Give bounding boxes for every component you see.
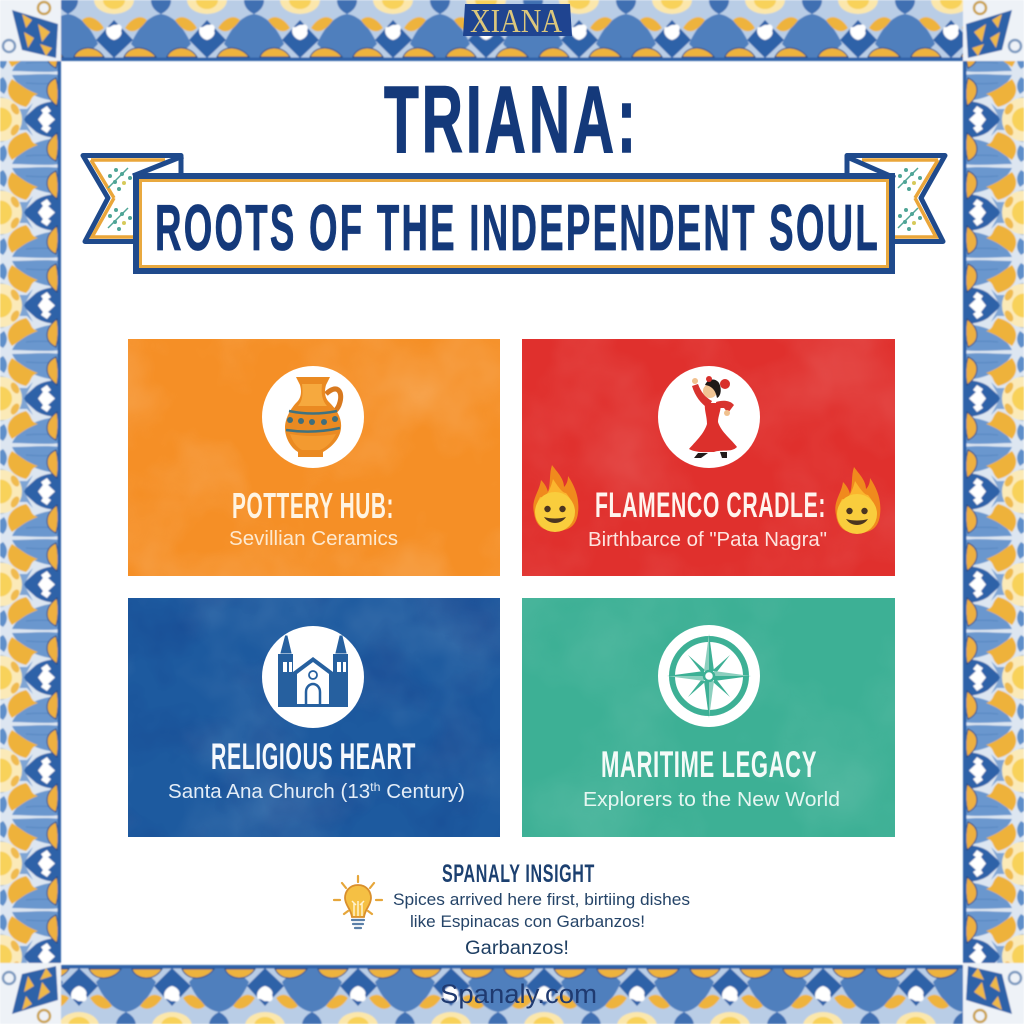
insight block xyxy=(334,860,690,959)
subheading: Century) xyxy=(380,781,465,803)
footer url: Spanaly.com xyxy=(440,979,597,1009)
insight text line 3: Garbanzos! xyxy=(465,938,569,959)
icon: compass rose xyxy=(658,625,760,727)
icon: church xyxy=(262,626,364,728)
icon: flamenco dancer xyxy=(658,366,760,468)
title: TRIANA: xyxy=(384,67,639,173)
panel: flamenco cradle xyxy=(522,339,895,576)
heading: RELIGIOUS HEART xyxy=(211,736,416,777)
panel: pottery hub xyxy=(128,339,500,576)
icon: jug xyxy=(262,366,364,468)
flame smiley right xyxy=(835,467,880,534)
insight text line 2: like Espinacas con Garbanzos! xyxy=(410,912,645,931)
subheading: Sevillian Ceramics xyxy=(229,528,398,550)
banner ribbon xyxy=(83,156,945,271)
panel: maritime legacy xyxy=(522,598,895,837)
insight heading: SPANALY INSIGHT xyxy=(442,860,595,888)
subheading: Birthbarce of "Pata Nagra" xyxy=(588,529,827,551)
heading: MARITIME LEGACY xyxy=(601,744,817,785)
insight text line 1: Spices arrived here first, birtiing dishes xyxy=(393,890,690,909)
subheading: Explorers to the New World xyxy=(583,789,840,811)
subheading: Santa Ana Church (13 xyxy=(168,781,365,803)
heading: POTTERY HUB: xyxy=(232,485,394,526)
top plaque: Xiana: XIANA xyxy=(470,3,562,40)
panel: religious heart xyxy=(128,598,500,837)
flame smiley left xyxy=(533,465,578,532)
right ribbon tail xyxy=(847,156,945,242)
icon: lightbulb xyxy=(334,876,382,928)
heading: FLAMENCO CRADLE: xyxy=(595,486,826,525)
banner plate xyxy=(136,176,892,271)
subheading: th xyxy=(370,780,380,794)
left ribbon tail xyxy=(83,156,183,242)
